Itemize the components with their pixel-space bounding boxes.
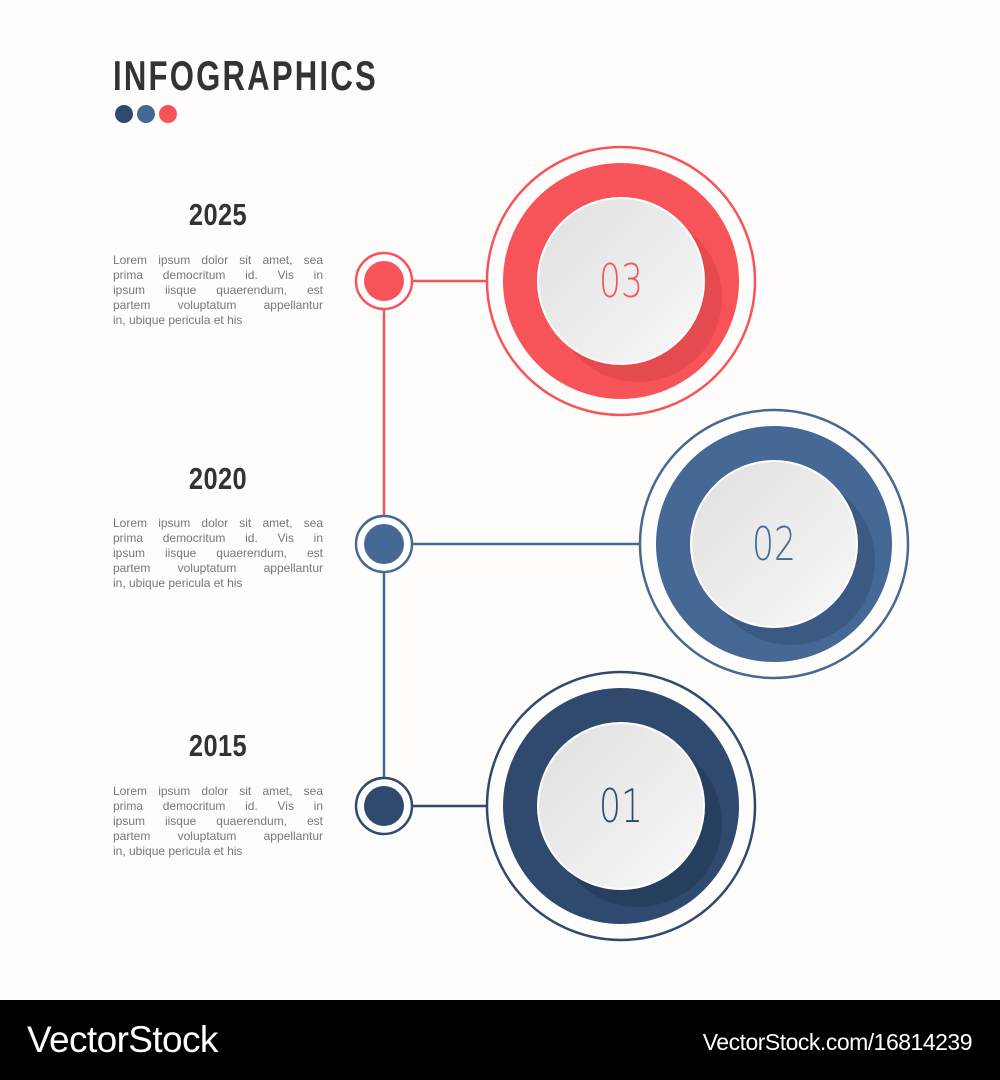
node 2020 [356, 516, 412, 572]
text 2020 [113, 516, 324, 590]
text 2020: Lorem ipsum dolor sit amet, sea [113, 516, 323, 530]
text 2020: in, ubique pericula et his [113, 576, 242, 590]
circle 03 [487, 147, 755, 415]
text 2015: prima democritum id. Vis in [113, 799, 323, 813]
circle 01: 01 [599, 779, 643, 833]
year 2020: 2020 [189, 461, 247, 496]
footer bar [0, 1000, 1000, 1080]
title: INFOGRAPHICS [113, 52, 378, 99]
circle 03: 03 [599, 254, 643, 308]
node 2015 [356, 778, 412, 834]
year 2015: 2015 [189, 728, 247, 763]
text 2025: ipsum iisque quaerendum, est [113, 283, 323, 297]
legend dots [115, 105, 177, 123]
footer logo: VectorStock [27, 1019, 218, 1060]
text 2015: ipsum iisque quaerendum, est [113, 814, 323, 828]
text 2020: partem voluptatum appellantur [113, 561, 323, 575]
connector lines [384, 281, 639, 806]
text 2015: partem voluptatum appellantur [113, 829, 323, 843]
text 2025: in, ubique pericula et his [113, 313, 242, 327]
footer url: VectorStock.com/16814239 [703, 1029, 972, 1055]
text 2020: ipsum iisque quaerendum, est [113, 546, 323, 560]
text 2025: prima democritum id. Vis in [113, 268, 323, 282]
text 2015: in, ubique pericula et his [113, 844, 242, 858]
text 2025: partem voluptatum appellantur [113, 298, 323, 312]
circle 02: 02 [752, 517, 796, 571]
text 2020: prima democritum id. Vis in [113, 531, 323, 545]
circle 02 [640, 410, 908, 678]
text 2015 [113, 784, 324, 858]
circle 01 [487, 672, 755, 940]
node 2025 [356, 253, 412, 309]
text 2025 [113, 253, 324, 327]
text 2015: Lorem ipsum dolor sit amet, sea [113, 784, 323, 798]
year 2025: 2025 [189, 197, 247, 232]
text 2025: Lorem ipsum dolor sit amet, sea [113, 253, 323, 267]
